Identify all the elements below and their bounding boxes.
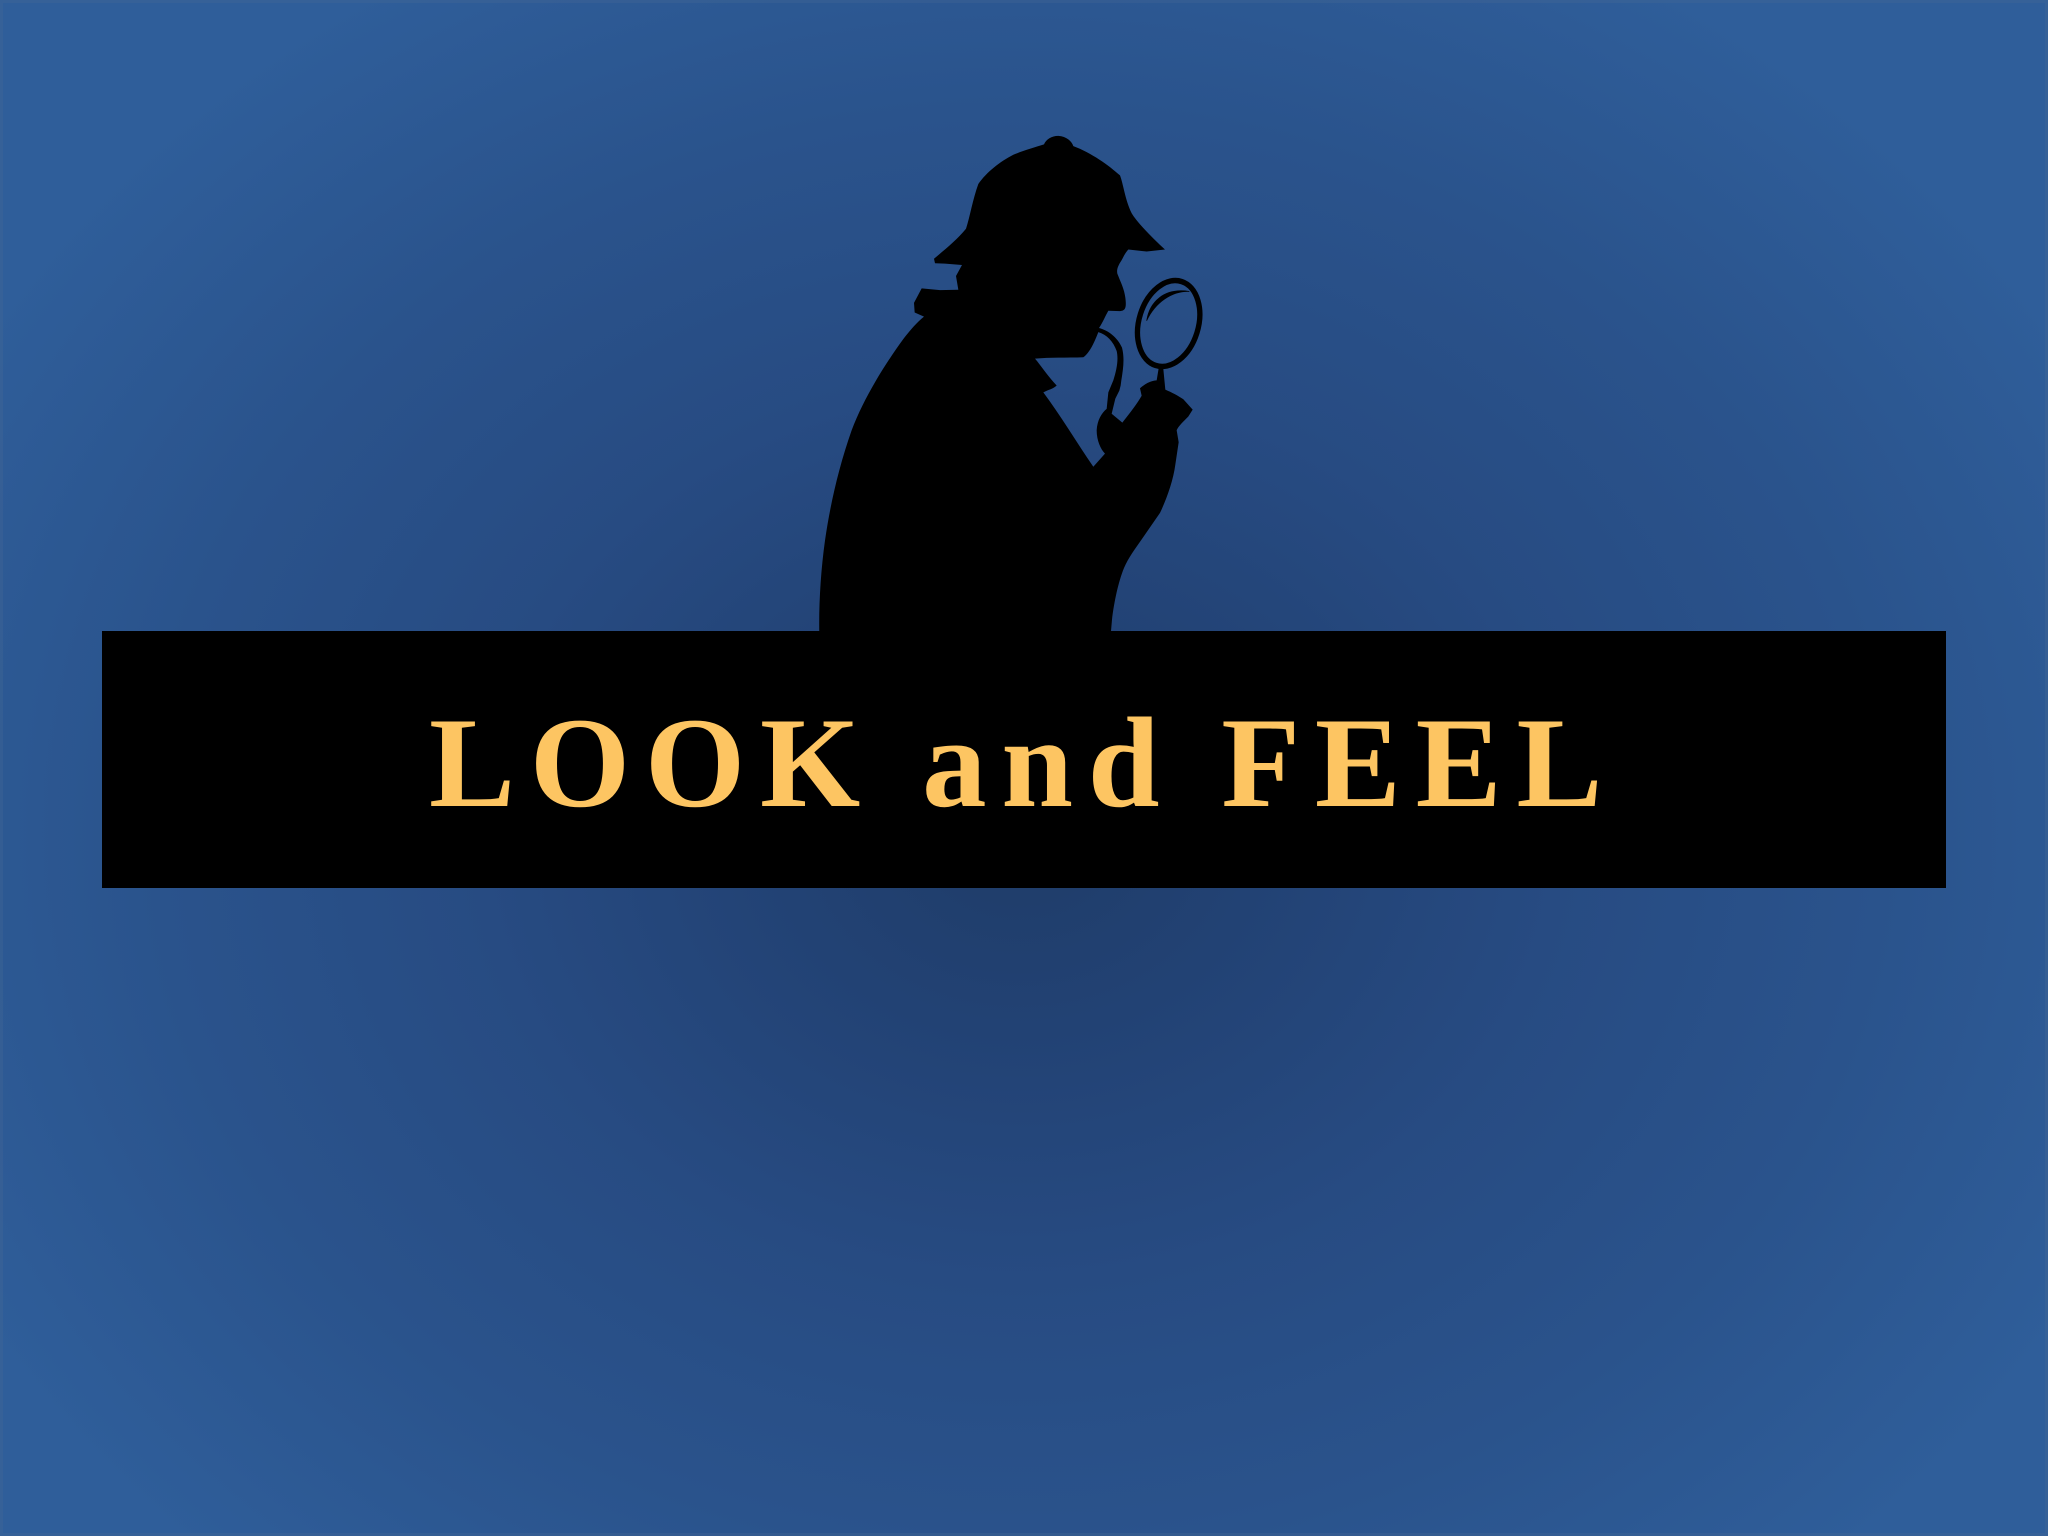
title: LOOK and FEEL [429,691,1617,834]
icon: magnifying glass ring [1127,272,1210,375]
title banner [102,631,1946,888]
icon: detective silhouette with pipe and magnifying glass [819,136,1210,635]
